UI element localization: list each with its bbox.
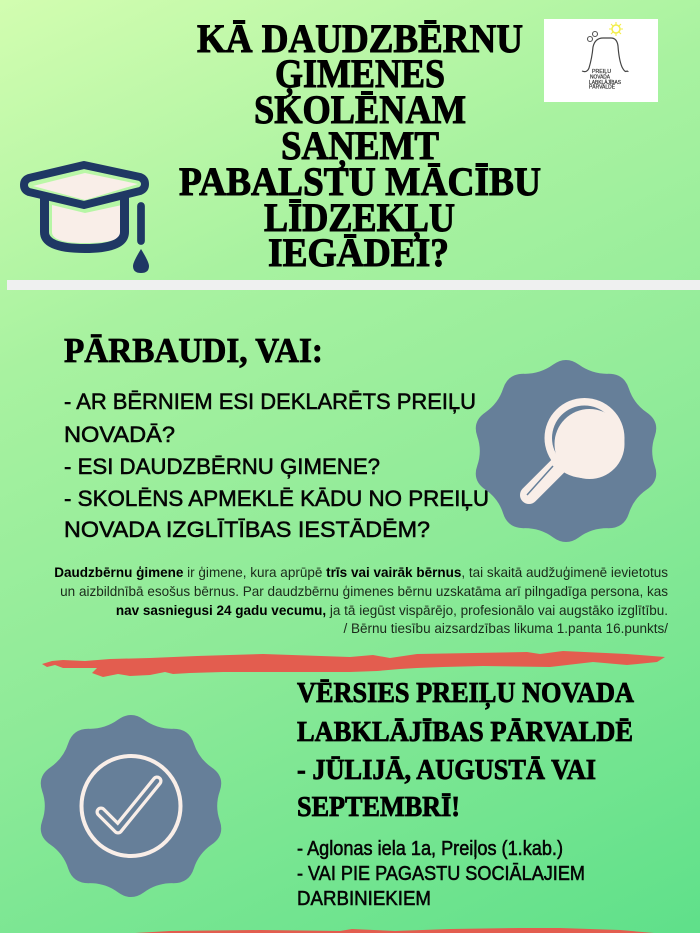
- title: SKOLĒNAM: [254, 87, 466, 132]
- title: KĀ DAUDZBĒRNU: [197, 16, 523, 61]
- icon: graduation cap: [24, 165, 149, 273]
- heading: where to apply: SEPTEMBRĪ!: [297, 792, 460, 823]
- logo: PĀRVALDE: [589, 84, 616, 90]
- title: [179, 16, 541, 275]
- address text: - Aglonas iela 1a, Preiļos (1.kab.): [297, 838, 563, 860]
- address text: - VAI PIE PAGASTU SOCIĀLAJIEM: [297, 862, 585, 885]
- checklist: - SKOLĒNS APMEKLĒ KĀDU NO PREIĻU: [64, 486, 489, 511]
- red brush stroke: [42, 651, 665, 677]
- definition paragraph: / Bērnu tiesību aizsardzības likuma 1.panta 16.punkts/: [343, 621, 668, 636]
- red brush stroke bottom: [135, 928, 654, 933]
- logo: [544, 19, 658, 102]
- icon: magnifier badge: [476, 360, 656, 542]
- definition paragraph: Daudzbērnu ģimene ir ģimene, kura aprūpē trīs vai vairāk bērnus, tai skaitā audžuģimenē ievietotus: [54, 565, 668, 580]
- title: LĪDZEKĻU: [264, 195, 455, 242]
- heading: where to apply: VĒRSIES PREIĻU NOVADA: [297, 678, 635, 710]
- title: IEGĀDEI?: [268, 230, 449, 275]
- definition paragraph: [54, 565, 668, 636]
- definition paragraph: un aizbildnībā esošus bērnus. Par daudzbērnu ģimenes bērnu uzskatāma arī pilngadīga persona, kas: [60, 584, 668, 599]
- heading: where to apply: [297, 678, 635, 823]
- address text: DARBINIEKIEM: [297, 888, 431, 910]
- logo: NOVADA: [590, 74, 611, 80]
- heading: where to apply: LABKLĀJĪBAS PĀRVALDĒ: [297, 717, 633, 748]
- checklist: - ESI DAUDZBĒRNU ĢIMENE?: [64, 454, 380, 479]
- checklist: - AR BĒRNIEM ESI DEKLARĒTS PREIĻU: [64, 389, 476, 414]
- icon: check badge: [41, 715, 221, 897]
- definition paragraph: nav sasniegusi 24 gadu vecumu, ja tā iegūst vispārējo, profesionālo vai augstāko izglītību.: [116, 603, 668, 618]
- checklist: NOVADA IZGLĪTĪBAS IESTĀDĒM?: [64, 517, 430, 542]
- title: PABALSTU MĀCĪBU: [179, 159, 541, 204]
- logo: PREIĻU: [592, 69, 611, 75]
- heading: where to apply: - JŪLIJĀ, AUGUSTĀ VAI: [297, 755, 596, 786]
- heading: check: PĀRBAUDI, VAI:: [64, 331, 323, 370]
- title: SAŅEMT: [281, 123, 439, 170]
- checklist: [64, 389, 489, 542]
- logo: LABKLĀJĪBAS: [589, 79, 622, 86]
- checklist: NOVADĀ?: [64, 422, 175, 447]
- address text: [297, 838, 585, 910]
- title: ĢIMENES: [275, 51, 445, 97]
